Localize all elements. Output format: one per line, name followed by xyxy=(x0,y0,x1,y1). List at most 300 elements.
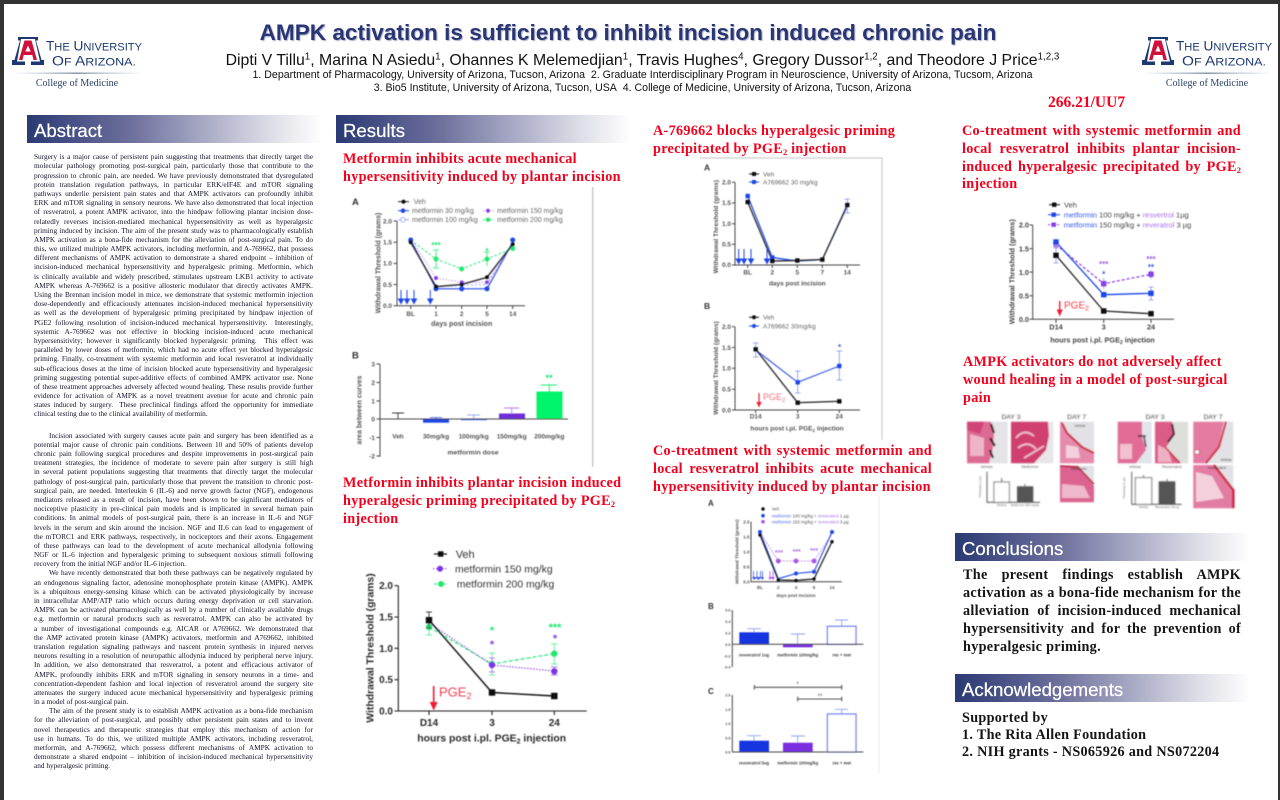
figure: wound healing, resveratrol xyxy=(1118,414,1233,509)
conclusions text: alleviation of incision-induced mechanical xyxy=(963,603,1241,619)
result heading: metformin priming xyxy=(343,475,621,527)
abstract text: relatedly reverses incision-mediated mechanical hypersensitivity as well as hyperalgesic xyxy=(34,216,313,226)
chart: co-treatment time course (A): 2.0 xyxy=(743,519,750,524)
abstract text: translation regulation signaling pathways and nascent protein synthesis in injured nerves xyxy=(34,642,313,651)
abstract text: is clinically available and widely prescribed, stimulates upstream LKB1 activity to activate xyxy=(34,272,313,281)
series: metformin 100 xyxy=(411,240,513,287)
significance brackets: * xyxy=(797,682,800,688)
series: vehicle xyxy=(409,240,515,289)
series: metformin 200: * xyxy=(485,247,489,256)
abstract text: neurons resulting in a resolution of neuropathic allodynia induced by peripheral nerve injury. xyxy=(34,651,313,660)
chart: A-769662 time course (A) xyxy=(700,158,882,440)
series: metformin 200: * xyxy=(490,625,495,637)
chart: metformin hyperalgesic priming: hours post i.pl. PGE xyxy=(417,734,517,744)
arrow: PGE2 xyxy=(756,392,786,408)
chart: metformin hyperalgesic priming: Withdrawal Threshold (grams) xyxy=(366,573,376,723)
chart: A-769662 time course (A): Withdrawal Threshold (grams) xyxy=(713,180,720,273)
chart: co-treatment hyperalgesic priming: D14 xyxy=(1049,322,1064,332)
arrow: PGE2 xyxy=(430,684,471,710)
histology: metformin day 3 xyxy=(1011,422,1053,463)
abstract text: potential major cause of chronic pain conditions. Between 10 and 50% of patients develop xyxy=(34,440,313,449)
chart: co-treatment bars (B) xyxy=(708,602,863,670)
bar: 100 mg/kg xyxy=(461,419,487,420)
chart: co-treatment hyperalgesic priming: 1.0 xyxy=(1019,268,1029,277)
abstract text: treatment strategies, the incidence of moderate to severe pain after surgery is still high xyxy=(34,458,313,467)
series xyxy=(753,343,842,405)
bar: res + met xyxy=(827,626,856,644)
legend: Veh xyxy=(772,507,780,512)
chart: co-treatment bars (C): 2.0 xyxy=(725,694,730,698)
abstract text: a number of investigational compounds e.g. AICAR or A769662. We demonstrated that xyxy=(34,624,313,633)
logo: University of Arizona right: OF ARIZONA. xyxy=(1182,54,1266,68)
chart: metformin area between curves (B): 0 xyxy=(371,416,375,423)
result heading: co-treatment priming: local resveratrol inhibits plantar incision- xyxy=(962,141,1241,157)
figure: wound healing, metformin: DAY 3 xyxy=(1001,414,1021,421)
chart: co-treatment hyperalgesic priming: 0.0 xyxy=(1019,315,1029,324)
chart: co-treatment time course (A): A xyxy=(708,499,714,508)
bar chart: wound width resveratrol: Resveratrol 30 µg xyxy=(1155,505,1179,509)
bar chart: wound width metformin: Vehicle xyxy=(997,503,1007,507)
abstract text: evidence for activation of AMPK as a novel treatment avenue for acute and chronic pain xyxy=(34,391,313,400)
arrow: PGE2: 2 xyxy=(782,398,786,404)
heading: abstract: Abstract xyxy=(34,120,102,141)
result heading: metformin acute: hypersensitivity induced by plantar incision xyxy=(343,169,621,185)
bar: 30 mg/kg xyxy=(423,419,449,423)
figure: wound healing, resveratrol: Resveratrol xyxy=(1162,465,1182,469)
abstract text: of resveratrol, a potent AMPK activator, into the hindpaw following plantar incision dose- xyxy=(34,207,313,216)
abstract text: novel therapeutics and therapeutic strategies that employ this mechanism of action for xyxy=(34,725,313,734)
chart: metformin hyperalgesic priming: 0.0 xyxy=(379,706,393,718)
histology: vehicle day 3 xyxy=(967,422,1008,463)
chart: co-treatment hyperalgesic priming: 3 xyxy=(1102,322,1106,332)
chart: metformin acute time course (A): days post incision xyxy=(431,321,492,328)
chart: metformin hyperalgesic priming: 1.0 xyxy=(379,644,393,655)
chart: A-769662 hyperalgesic priming (B): B xyxy=(704,301,710,311)
bar chart: wound width metformin xyxy=(978,472,1040,507)
bar chart: wound width resveratrol: Thickness in µm xyxy=(1122,477,1126,499)
abstract text: in intracellular AMP/ATP ratio which occurs during energy deprivation or cell starvation. xyxy=(34,596,313,605)
heading: acknowledgements: Acknowledgements xyxy=(962,679,1123,700)
abstract text: molecular pathology promoting post-surgical pain, particularly those that contribute to the xyxy=(34,161,313,170)
chart: co-treatment bars (B): 0.4 xyxy=(725,620,731,624)
result heading: co-treatment priming: Co-treatment with systemic metformin and xyxy=(962,123,1241,139)
chart: A-769662 hyperalgesic priming (B): 24 xyxy=(836,414,843,420)
abstract text: incision-induced mechanical hypersensitivity and hyperalgesic priming. Metformin, which xyxy=(34,262,313,271)
heading: conclusions: Conclusions xyxy=(962,538,1063,559)
series: metformin 150: * xyxy=(553,633,558,645)
chart: co-treatment bars (B): 0.0 xyxy=(725,643,730,647)
result heading: A-769662: precipitated by PGE2 injection xyxy=(653,141,847,157)
chart: A-769662 hyperalgesic priming (B): 0.5 xyxy=(722,386,731,394)
chart: A-769662 hyperalgesic priming (B): injection xyxy=(815,425,844,432)
bar: 200 mg/kg xyxy=(536,392,562,419)
figure: wound healing, metformin: DAY 7 xyxy=(1067,414,1086,421)
logo: University of Arizona left: College of Medicine xyxy=(36,78,119,89)
chart: co-treatment time course (A): 0.5 xyxy=(743,564,750,569)
bar: metformin xyxy=(783,743,813,752)
abstract text: dose-dependently and efficaciously attenuates incision-induced mechanical hypersensitivity xyxy=(34,299,313,308)
series: metformin 150 xyxy=(411,238,513,284)
chart: co-treatment bars (B): 0.6 xyxy=(725,608,730,612)
chart: A-769662 hyperalgesic priming (B) xyxy=(704,301,860,433)
chart: metformin area between curves (B): 1 xyxy=(371,398,375,405)
abstract text: in a model of post-surgical pain. xyxy=(34,697,128,706)
bar: 150 mg/kg xyxy=(499,414,525,419)
series: *** xyxy=(793,549,801,556)
result heading: metformin priming: injection xyxy=(343,511,399,527)
heading: results: Results xyxy=(343,120,405,141)
chart: A-769662 hyperalgesic priming (B): 0.0 xyxy=(722,407,731,414)
chart: metformin acute time course (A): 1.0 xyxy=(383,261,392,268)
abstract text: The aim of the present study is to establish AMPK activation as a bona-fide mechanism xyxy=(49,706,313,715)
series: *** xyxy=(1099,260,1109,269)
chart: metformin hyperalgesic priming: 24 xyxy=(549,718,560,729)
legend: A769662 30 mg/kg xyxy=(763,179,818,186)
chart: A-769662 time course (A): 1.5 xyxy=(722,200,731,207)
abstract text: pathology of post-surgical pain, particularly those that prevent the transition to chronic post- xyxy=(34,477,313,486)
authors: Dipti V Tillu1, Marina N Asiedu1, Ohannes K Melemedjian1, Travis Hughes4, Gregory Dussor1,2, and Theodore J Price1,2,3 xyxy=(226,52,1059,69)
chart: metformin acute time course (A): Withdrawal Threshold (grams) xyxy=(376,213,382,313)
series: metformin 200: *** xyxy=(431,241,442,250)
result heading: wound healing xyxy=(963,354,1228,406)
bar: res + met xyxy=(827,714,856,752)
abstract text: recovery from the initial NGF and/or IL-6 injection. xyxy=(34,559,186,568)
chart: co-treatment bars (C) xyxy=(708,682,863,766)
chart: co-treatment bars (C): 0.0 xyxy=(725,750,730,754)
acknowledgements text: 2. NIH grants - NS065926 and NS072204 xyxy=(962,744,1219,760)
abstract text: pathways underlie persistent pain states and that AMPK activators can profoundly inhibit xyxy=(34,189,313,198)
chart: co-treatment bars (B): res + met xyxy=(832,652,852,658)
result heading: A-769662 xyxy=(653,123,895,157)
abstract text: and hyperalgesic priming. xyxy=(34,761,110,770)
affiliations: 3. Bio5 Institute, University of Arizona, Tucson, USA 4. College of Medicine, University of Arizona, Tucson, Arizona xyxy=(374,82,911,94)
abstract text: AMPK activation as a bona-fide mechanism for the alleviation of post-surgical pain. To do xyxy=(34,235,313,244)
series xyxy=(746,194,850,263)
chart: metformin area between curves (B): 150mg/kg xyxy=(497,434,527,440)
chart: co-treatment time course (A): BL xyxy=(757,585,763,590)
abstract text: paralleled by lower doses of metformin, which had no acute effect yet blocked hyperalgesic xyxy=(34,345,313,354)
abstract text: levels in the serum and skin around the incision. NGF and IL6 can lead to engagement of xyxy=(34,522,313,532)
legend: metformin 30 mg/kg xyxy=(412,208,474,215)
chart: metformin acute time course (A): BL xyxy=(406,311,415,318)
series: * xyxy=(1102,270,1106,279)
abstract text: metformin, and A-769662, which possess different mechanisms of AMPK activation to xyxy=(34,743,313,752)
chart: metformin acute time course (A): 0.0 xyxy=(383,303,392,310)
result heading: wound healing: wound healing in a model of post-surgical xyxy=(963,372,1228,388)
legend: metformin 100 mg/kg + resveratrol 1 µg xyxy=(772,513,849,518)
arrow: PGE2: PGE xyxy=(439,684,466,700)
chart: metformin hyperalgesic priming: 1.5 xyxy=(379,612,393,624)
figure: wound healing, resveratrol: DAY 3 xyxy=(1145,414,1165,421)
chart: co-treatment hyperalgesic priming: 0.5 xyxy=(1019,291,1029,300)
chart: co-treatment bars (B): -0.2 xyxy=(724,654,730,658)
histology: vehicle day 7: Vehicle xyxy=(1074,424,1086,428)
conclusions text: hyperalgesic priming. xyxy=(963,639,1101,655)
abstract text: of these pathways can lead to the development of acute mechanical allodynia following xyxy=(34,541,313,550)
abstract text: priming suggesting potential super-additive effects of combined AMPK activator use. None xyxy=(34,373,313,382)
chart: co-treatment hyperalgesic priming: 24 xyxy=(1147,322,1156,332)
chart: co-treatment bars (B): -0.4 xyxy=(724,666,731,670)
chart: metformin hyperalgesic priming xyxy=(366,549,587,746)
result heading: co-treatment acute xyxy=(653,443,932,495)
abstract text: in several patient populations suggesting that treatments that directly target the molecular xyxy=(34,467,313,476)
abstract text: Incision associated with surgery causes acute pain and surgery has been identified as a xyxy=(49,431,313,440)
logo: University of Arizona right xyxy=(1141,37,1274,89)
chart: A-769662 time course (A): BL xyxy=(743,270,752,276)
bar chart: wound width metformin: Metformin 200 mg/kg xyxy=(1011,503,1039,507)
result heading: co-treatment priming: induced hyperalgesic precipitated by PGE2 xyxy=(962,159,1241,175)
abstract text: surgical pain, are needed. Interleukin 6 (IL-6) and nerve growth factor (NGF), endogenous xyxy=(34,486,313,495)
chart: co-treatment time course (A) xyxy=(708,495,879,773)
legend xyxy=(398,199,563,224)
chart: metformin hyperalgesic priming: D14 xyxy=(420,718,439,729)
chart: metformin acute time course (A): 14 xyxy=(509,311,517,318)
significance brackets xyxy=(754,682,842,701)
abstract text: In addition, we also demonstrated that resveratrol, a potent and efficacious activator of xyxy=(34,660,313,669)
series: metformin 200 xyxy=(426,619,562,675)
chart: co-treatment bars (C): 1.5 xyxy=(725,708,730,712)
heading: acknowledgements xyxy=(955,674,1250,702)
abstract text: is a ubiquitous energy-sensing kinase which can be activated physiologically by increase xyxy=(34,587,313,596)
arrow: PGE2: 2 xyxy=(1085,306,1089,313)
conclusions text: The present findings establish AMPK xyxy=(963,567,1241,583)
logo: University of Arizona right: College of Medicine xyxy=(1166,78,1249,89)
result heading: metformin priming: hyperalgesic priming precipitated by PGE2 xyxy=(343,493,615,509)
series: metformin 30 xyxy=(408,238,515,291)
result heading: co-treatment acute: local resveratrol inhibits acute mechanical xyxy=(653,461,932,477)
chart: co-treatment bars (B): resveratrol 1ug xyxy=(739,652,770,658)
legend: metformin 200 mg/kg xyxy=(457,580,555,591)
histology: resveratrol day 3 xyxy=(1155,422,1188,463)
abstract text: e.g. metformin or natural products such as resveratrol. AMPK can also be activated by xyxy=(34,614,313,623)
series: *** xyxy=(810,548,818,555)
chart: A-769662 hyperalgesic priming (B): 1.5 xyxy=(722,345,731,352)
series: ** xyxy=(1148,263,1155,272)
abstract text: an endogenous signaling factor, adenosine monophosphate protein kinase (AMPK). AMPK xyxy=(34,578,313,587)
heading: conclusions xyxy=(955,533,1250,561)
series: metformin 200 xyxy=(408,238,515,271)
result heading: metformin acute xyxy=(343,151,621,185)
heading: results xyxy=(336,115,631,143)
arrow: PGE2: PGE xyxy=(763,392,782,402)
series: metformin 150: * xyxy=(490,639,495,651)
chart: co-treatment time course (A): 1.5 xyxy=(743,534,750,539)
heading: abstract xyxy=(27,115,322,143)
chart: metformin area between curves (B): 30mg/kg xyxy=(423,434,449,440)
legend: metformin 150 mg/kg + reveratrol 3 µg xyxy=(1064,220,1191,229)
acknowledgements text: Supported by xyxy=(962,710,1048,726)
abstract text: clinical testing due to the clinical availability of metformin. xyxy=(34,409,208,418)
conclusions text: activation as a bona-fide mechanism for the xyxy=(963,585,1241,601)
result heading: co-treatment priming: injection xyxy=(962,176,1018,192)
chart: A-769662 hyperalgesic priming (B): hours post i.pl. PGE xyxy=(750,425,813,432)
chart: co-treatment time course (A): 0.0 xyxy=(743,579,750,584)
chart: metformin acute time course (A): 2 xyxy=(460,311,464,318)
chart: co-treatment time course (A): 2 xyxy=(777,585,780,590)
histology: resveratrol day 7: Resveratrol xyxy=(1208,466,1226,470)
chart: co-treatment hyperalgesic priming: 2.0 xyxy=(1019,221,1029,230)
abstract text: the AMP activated protein kinase (AMPK) activators, metformin and A769662, inhibited xyxy=(34,633,313,642)
result heading: co-treatment acute: Co-treatment with systemic metformin and xyxy=(653,443,932,459)
abstract text: AMPK whereas A-769662 is a positive allosteric modulator that directly activates AMPK. xyxy=(34,281,313,290)
poster number: 266.21/UU7 xyxy=(1048,94,1125,111)
arrow: PGE2: 2 xyxy=(466,691,471,701)
abstract text: AMPK can be activated pharmacologically as well by a number of clinically available drugs xyxy=(34,605,313,614)
chart: co-treatment hyperalgesic priming: injection xyxy=(1123,336,1155,345)
chart: A-769662 time course (A): 14 xyxy=(844,270,851,276)
legend: metformin 150 mg/kg xyxy=(497,208,563,215)
affiliations xyxy=(252,69,1032,94)
abstract text: concentration-dependent fashion and local injection of resveratrol around the surgery site xyxy=(34,679,313,688)
histology: metformin day 7: Metformin xyxy=(1071,467,1087,471)
abstract text: ERK and mTOR signaling in sensory neurons. We have also demonstrated that local injection xyxy=(34,198,313,207)
abstract text: mediators released as a result of incision, have been shown to be significant mediators of xyxy=(34,495,313,504)
title: AMPK activation is sufficient to inhibit incision induced chronic pain xyxy=(260,20,996,45)
result heading: A-769662: A-769662 blocks hyperalgesic priming xyxy=(653,123,895,139)
logo: University of Arizona left: OF ARIZONA. xyxy=(52,54,136,68)
chart: co-treatment time course (A): 1.0 xyxy=(743,549,750,554)
chart: A-769662 hyperalgesic priming (B): 3 xyxy=(796,414,800,420)
chart: metformin area between curves (B): area between curves xyxy=(356,375,364,444)
chart: metformin hyperalgesic priming: 0.5 xyxy=(379,675,393,686)
chart: metformin hyperalgesic priming: 3 xyxy=(489,718,495,729)
chart: metformin hyperalgesic priming: injection xyxy=(520,734,566,744)
legend xyxy=(433,549,555,591)
conclusions text xyxy=(963,567,1241,655)
chart: co-treatment hyperalgesic priming xyxy=(1007,200,1191,346)
chart: metformin acute time course (A): A xyxy=(352,197,359,208)
chart: A-769662 hyperalgesic priming (B): Withdrawal Threshold (grams) xyxy=(713,321,720,415)
chart: metformin acute time course (A): 0.5 xyxy=(383,282,392,289)
logo: University of Arizona left xyxy=(11,37,144,89)
bar: resveratrol xyxy=(739,741,769,752)
chart: metformin area between curves (B): metformin dose xyxy=(448,450,499,456)
chart: A-769662 hyperalgesic priming (B): D14 xyxy=(750,414,762,420)
figure: wound healing, metformin: Metformin xyxy=(1022,465,1038,469)
abstract text: We have recently demonstrated that both these pathways can be negatively regulated by xyxy=(49,568,313,577)
chart: A-769662 time course (A): A xyxy=(704,162,710,172)
figure: wound healing, resveratrol: Vehicle xyxy=(1129,465,1141,469)
abstract text: as well as the development of hyperalgesic priming precipitated by hindpaw injection of xyxy=(34,308,313,317)
arrow: PGE2: PGE xyxy=(1064,301,1085,312)
acknowledgements text: 1. The Rita Allen Foundation xyxy=(962,727,1146,743)
chart: co-treatment time course (A): 4 xyxy=(795,585,798,590)
legend: metformin 100 mg/kg xyxy=(412,217,478,224)
chart: metformin area between curves (B): B xyxy=(352,350,359,362)
chart: co-treatment bars (C): metformin 100mg/kg xyxy=(777,760,819,766)
series xyxy=(1053,239,1157,316)
abstract text: attenuates the surgery induced acute mechanical hypersensitivity and hyperalgesic priming xyxy=(34,688,313,697)
series: *** xyxy=(1146,255,1157,264)
chart: A-769662 hyperalgesic priming (B): 2.0 xyxy=(722,324,731,331)
legend xyxy=(1048,200,1191,229)
chart: metformin acute time course (A): 1 xyxy=(434,311,438,318)
abstract text: of these treatment approaches adversely affected wound healing. These results provide further xyxy=(34,382,313,391)
abstract text: demonstrate a shared endpoint – inhibition of incision-induced mechanical hypersensitivity xyxy=(34,752,313,761)
figure: wound healing, resveratrol: DAY 7 xyxy=(1203,414,1223,421)
chart: co-treatment hyperalgesic priming: 2 xyxy=(1120,340,1123,346)
histology: vehicle day 3 xyxy=(1118,422,1152,463)
series xyxy=(758,530,834,582)
chart: co-treatment time course (A): Withdrawal Threshold (grams) xyxy=(734,519,739,584)
abstract text: priming induced by incision. The aim of the present study was to pharmacologically establish xyxy=(34,226,313,235)
chart: A-769662 time course (A): 1.0 xyxy=(722,221,731,228)
legend: Veh xyxy=(1064,200,1077,209)
chart: metformin area between curves (B) xyxy=(352,350,568,460)
chart: metformin area between curves (B): ** xyxy=(545,373,553,383)
legend: metformin 100 mg/kg + resvertrol 1µg xyxy=(1064,210,1189,219)
chart: A-769662 time course (A): 5 xyxy=(795,270,799,276)
abstract text: Using the Brennan incision model in mice, we demonstrate that systemic metformin injection xyxy=(34,290,313,299)
legend xyxy=(749,171,818,186)
abstract text: use in humans. To do this, we utilized multiple AMPK activators, including resveratrol, xyxy=(34,734,313,743)
significance brackets: ** xyxy=(818,694,823,700)
chart: A-769662 time course (A): days post incision xyxy=(769,280,826,288)
abstract text: states induced by surgery. These preclinical findings afford the opportunity for immediate xyxy=(34,400,313,409)
legend: Veh xyxy=(414,199,426,206)
arrow: PGE2 xyxy=(1057,301,1089,316)
chart: A-769662 time course (A): 2.0 xyxy=(722,180,731,186)
abstract text: nociceptive plasticity in pre-clinical pain models and is implicated in several human pain xyxy=(34,504,313,513)
chart: co-treatment bars (C): C xyxy=(708,687,714,696)
series: metformin 200: *** xyxy=(549,622,562,634)
series: * xyxy=(838,343,842,352)
chart: metformin acute time course (A): 2.0 xyxy=(383,218,392,225)
legend xyxy=(761,507,849,524)
figure: wound healing, metformin: Vehicle xyxy=(981,465,993,469)
result heading: wound healing: pain xyxy=(963,390,991,406)
chart: metformin hyperalgesic priming: 2.0 xyxy=(379,581,393,592)
series: metformin 150 xyxy=(429,623,558,675)
chart: A-769662 time course (A): 0.5 xyxy=(722,242,731,248)
chart: co-treatment time course (A): days post incision xyxy=(776,593,816,598)
chart: co-treatment bars (C): 0.5 xyxy=(725,736,730,740)
chart: A-769662 time course (A): 7 xyxy=(820,270,824,276)
affiliations: 1. Department of Pharmacology, University of Arizona, Tucson, Arizona 2. Graduate Interdisciplinary Program in Neuroscience, University of Arizona, Tucsom, Arizona xyxy=(252,69,1032,81)
abstract text: this, we utilized multiple AMPK activators, including metformin, and A-769662, that possess xyxy=(34,244,313,253)
chart: co-treatment hyperalgesic priming: Withdrawal Threshold (grams) xyxy=(1007,219,1016,324)
dosing arrows xyxy=(736,249,770,264)
chart: A-769662 time course (A): 2 xyxy=(770,270,774,276)
legend: Veh xyxy=(763,171,775,178)
bar chart: wound width metformin: Thickness in µm xyxy=(978,476,982,498)
chart: A-769662 hyperalgesic priming (B): 2 xyxy=(813,428,816,433)
dosing arrows xyxy=(398,290,433,304)
abstract text: priming. Finally, co-treatment with systemic metformin and local resveratrol at individually xyxy=(34,354,313,363)
abstract text: systemic A-769662 was not effective in blocking incision-induced acute mechanical xyxy=(34,327,313,336)
legend: metformin 150 mg/kg xyxy=(455,564,553,575)
histology: vehicle day 7: Vehicle xyxy=(1220,458,1232,462)
conclusions text: hypersensitivity and for the prevention of xyxy=(963,621,1241,637)
abstract text: PGE2 following resolution of incision-induced mechanical hypersensitivity. Interestingly, xyxy=(34,318,313,327)
chart: co-treatment bars (C): res + met xyxy=(832,760,852,766)
abstract text: different mechanisms of AMPK activation to demonstrate a shared endpoint – inhibition of xyxy=(34,253,313,262)
bar: resveratrol xyxy=(739,632,769,644)
result heading: wound healing: AMPK activators do not adversely affect xyxy=(963,354,1222,370)
chart: metformin acute time course (A) xyxy=(352,187,593,467)
abstract text: for the alleviation of post-surgical, and possibly other persistent pain states and to invent xyxy=(34,715,313,724)
chart: metformin acute time course (A): 5 xyxy=(485,311,489,318)
chart: co-treatment hyperalgesic priming: hours post i.pl. PGE xyxy=(1050,336,1120,345)
chart: metformin area between curves (B): Veh xyxy=(392,434,404,440)
abstract text xyxy=(34,152,313,770)
abstract text: the mTORC1 and ERK pathways, respectively, in nociceptors and their axons. Engagement xyxy=(34,532,313,541)
abstract text: Surgery is a major cause of persistent pain suggesting that treatments that directly target the xyxy=(34,152,313,161)
bar chart: wound width resveratrol: Vehicle xyxy=(1139,505,1149,509)
chart: co-treatment bars (C): resveratrol 5ug xyxy=(739,760,770,766)
chart: metformin area between curves (B): 100mg/kg xyxy=(459,434,489,440)
chart: A-769662 hyperalgesic priming (B): 1.0 xyxy=(722,366,731,373)
